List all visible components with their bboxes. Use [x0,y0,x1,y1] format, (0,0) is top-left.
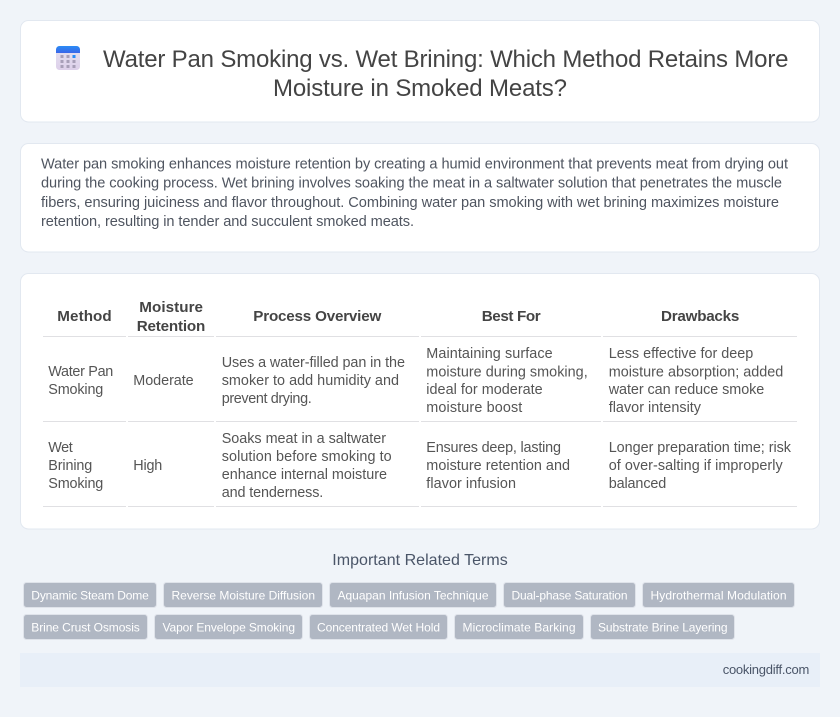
panel: introduction [20,144,820,252]
table row: wet brining smoking: balanced [609,476,666,492]
table row: wet brining smoking: Longer preparation time; risk [609,440,792,456]
table row: water pan smoking [43,346,797,422]
intro paragraph: Water pan smoking enhances moisture retention by creating a humid environment that prevents meat from drying out [41,156,788,172]
table row: water pan smoking: moisture during smoking, [426,364,588,380]
table row: water pan smoking: water can reduce smoke [608,382,764,398]
tag: Reverse Moisture Diffusion: Reverse Moisture Diffusion [172,588,315,602]
tag: Brine Crust Osmosis [24,614,148,640]
table row: water pan smoking: moisture absorption; added [609,364,783,380]
table row: wet brining smoking: Brining [48,458,92,474]
table header row: Moisture [139,299,203,316]
table row: water pan smoking: Less effective for deep [609,346,753,362]
table header row: Drawbacks [661,308,739,325]
tag: Dual-phase Saturation [504,582,636,608]
tag: Aquapan Infusion Technique [330,582,496,608]
footer source text: cookingdiff.com [723,662,809,677]
table header row [43,299,797,337]
tag: Microclimate Barking: Microclimate Barking [462,620,576,634]
table row: water pan smoking: prevent drying. [222,391,312,407]
table row: wet brining smoking: Soaks meat in a saltwater [222,431,386,447]
tag: Dynamic Steam Dome: Dynamic Steam Dome [31,588,149,602]
tag: Dual-phase Saturation: Dual-phase Saturation [512,588,628,602]
table header row: Process Overview [253,308,381,325]
table row: water pan smoking: Smoking [48,382,103,398]
heading: Moisture in Smoked Meats? [273,75,567,102]
footer [20,653,820,687]
tag: Hydrothermal Modulation [642,582,794,608]
tag: Hydrothermal Modulation: Hydrothermal Modulation [650,588,786,602]
table row: water pan smoking: moisture boost [426,400,522,416]
panel: comparison table [20,274,820,529]
tag: Brine Crust Osmosis: Brine Crust Osmosis [31,620,140,634]
table row: water pan smoking: Uses a water-filled pan in the [222,355,405,371]
table row: wet brining smoking: Wet [48,440,73,456]
table row: wet brining smoking: enhance internal moisture [222,467,387,483]
table row: wet brining smoking: Ensures deep, lasting [426,440,561,456]
heading: Water Pan Smoking vs. Wet Brining: Which Method Retains More [103,46,788,73]
tag: Concentrated Wet Hold [310,614,448,640]
table row: wet brining smoking: High [133,458,162,474]
table row: water pan smoking: ideal for moderate [426,382,543,398]
intro paragraph: fibers, ensuring juiciness and flavor throughout. Combining water pan smoking with wet brining maximizes moisture [41,195,779,211]
tag: Vapor Envelope Smoking: Vapor Envelope Smoking [162,620,295,634]
tag: Substrate Brine Layering [590,614,734,640]
tag: Substrate Brine Layering: Substrate Brine Layering [598,620,728,634]
table row: wet brining smoking: moisture retention and [426,458,570,474]
table header row: Retention [137,318,205,335]
tag: Dynamic Steam Dome [24,582,156,608]
table row: water pan smoking: smoker to add humidity and [222,373,399,389]
table row: water pan smoking: Moderate [133,373,194,389]
intro paragraph [41,156,788,230]
table header row: Best For [482,308,541,325]
heading [103,46,788,102]
table row: wet brining smoking: of over-salting if improperly [609,458,783,474]
intro paragraph: during the cooking process. Wet brining involves soaking the meat in a saltwater solution that penetrates the muscle [41,176,782,192]
tag: Aquapan Infusion Technique: Aquapan Infusion Technique [338,588,489,602]
tag: Reverse Moisture Diffusion [164,582,322,608]
table row: water pan smoking: flavor intensity [609,400,702,416]
tag: Vapor Envelope Smoking [154,614,302,640]
table row: wet brining smoking: solution before smoking to [222,449,392,465]
tag: Concentrated Wet Hold: Concentrated Wet Hold [317,620,440,634]
panel: title card [20,20,820,122]
tag: Microclimate Barking [454,614,584,640]
table row: wet brining smoking [43,431,797,507]
icon: calendar [56,46,80,70]
section heading: related terms: Important Related Terms [332,552,508,569]
table row: wet brining smoking: and tenderness. [222,485,323,501]
intro paragraph: retention, resulting in tender and succulent smoked meats. [41,214,414,230]
table header row: Method [57,308,112,325]
table row: wet brining smoking: Smoking [48,476,103,492]
panel: related term tags [24,582,794,640]
table row: wet brining smoking: flavor infusion [426,476,516,492]
table row: water pan smoking: Maintaining surface [426,346,553,362]
table row: water pan smoking: Water Pan [48,364,113,380]
